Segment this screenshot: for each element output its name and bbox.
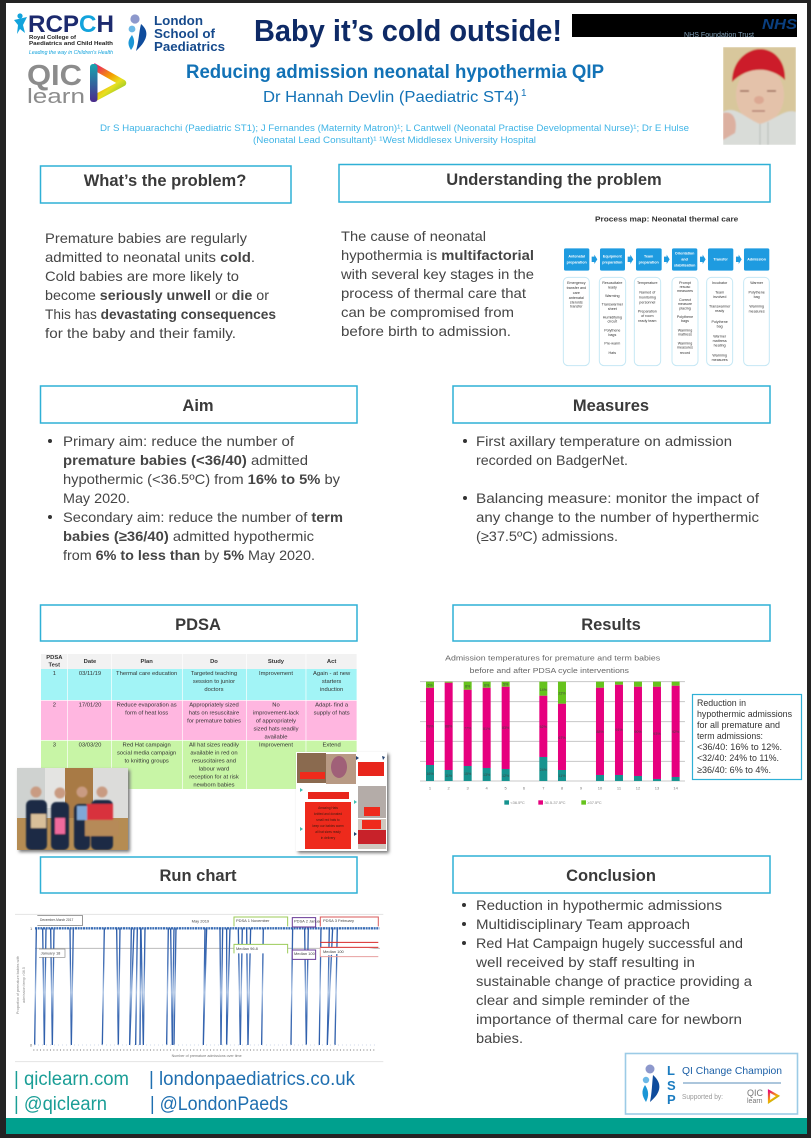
diagram: process map: placing xyxy=(679,306,691,310)
table: PDSA cycles: Reduce evaporation as xyxy=(117,703,177,709)
chart: admission temperatures stacked bars: 83% xyxy=(502,726,510,730)
callout: reduction in hypothermic admissions: for all premature and xyxy=(697,720,780,731)
chart: run chart: Proportion of premature babies with xyxy=(16,956,20,1014)
table: PDSA cycles: Again - at new xyxy=(313,671,351,677)
table: PDSA cycles: starters xyxy=(322,679,341,685)
footer band xyxy=(6,1118,807,1134)
diagram: process map: Orientation xyxy=(675,251,694,255)
diagram: process map: Team xyxy=(715,291,724,295)
table: PDSA cycles: Targeted teaching xyxy=(191,671,237,677)
diagram: process map: measures xyxy=(677,346,693,350)
table: PDSA cycles: Plan xyxy=(140,659,153,665)
text: measures list: Balancing measure: monitor the impact of xyxy=(476,490,759,506)
diagram: process map: Warmer xyxy=(713,335,727,339)
diagram: process map: Admission xyxy=(747,258,766,262)
text: conclusion list: Red Hat Campaign hugely successful and xyxy=(476,935,743,951)
diagram: process map: antenatal xyxy=(569,296,584,300)
poster: red hat campaign: in delivery xyxy=(321,836,336,840)
text: aims list: May 2020. xyxy=(63,490,130,506)
poster: red hat campaign: small red hats to xyxy=(316,818,340,822)
table: PDSA cycles: for premature babies xyxy=(187,719,241,725)
text: conclusion list: Multidisciplinary Team approach xyxy=(476,916,690,932)
chart: run chart: Median 96.8 xyxy=(236,946,259,951)
diagram: process map: bags xyxy=(681,319,689,323)
text: conclusion list: babies. xyxy=(476,1030,523,1046)
text: aims list xyxy=(48,433,343,563)
chart: admission temperatures stacked bars: 12 xyxy=(636,785,641,790)
chart: admission temperatures stacked bars: 91% xyxy=(615,728,623,732)
text: problem: admitted to neonatal units cold. xyxy=(45,249,255,265)
diagram: process map: Warming xyxy=(678,342,692,346)
logo: QIC learn xyxy=(27,60,123,108)
table: PDSA cycles: hats on resuscitaire xyxy=(189,711,239,717)
diagram: process map: record xyxy=(680,351,690,355)
chart: admission temperatures stacked bars: 5% xyxy=(503,683,509,687)
text: problem: for the baby and their family. xyxy=(45,325,236,341)
chart: admission temperatures stacked bars: 13 xyxy=(655,785,660,790)
callout: reduction in hypothermic admissions xyxy=(692,694,802,780)
diagram: process map: Emergency xyxy=(567,281,586,285)
badge: QI Change Champion xyxy=(626,1054,798,1114)
chart: admission temperatures stacked bars: 24% xyxy=(540,768,548,772)
chart: run chart: PDSA 1 November xyxy=(236,918,270,923)
panel: run chart heading: Run chart xyxy=(159,867,237,885)
chart: admission temperatures stacked bars: 78% xyxy=(426,725,434,729)
NHS logo bar xyxy=(572,14,797,39)
text: aims list: hypothermic (<36.5ºC) from 16% to 5% by xyxy=(63,471,340,487)
text: conclusion list xyxy=(462,897,752,1046)
chart: admission temperatures stacked bars: 2 xyxy=(448,785,451,790)
authors xyxy=(100,123,689,146)
diagram: process map: Process map: Neonatal thermal care xyxy=(595,215,738,224)
table: PDSA cycles: newborn babies xyxy=(193,783,235,789)
table: PDSA cycles: supply of hats xyxy=(314,711,350,717)
text: aims list: Secondary aim: reduce the number of term xyxy=(63,509,343,525)
chart: admission temperatures stacked bars: 6 xyxy=(523,785,526,790)
diagram: process map: sheet xyxy=(608,307,617,311)
title: Baby it’s cold outside! xyxy=(254,13,562,48)
diagram: process map: care xyxy=(573,291,580,295)
text: aims list: Primary aim: reduce the number of xyxy=(63,433,294,449)
diagram: process map: Transwarmer xyxy=(709,305,731,309)
table: PDSA cycles: Study xyxy=(268,659,285,665)
diagram: process map: bag xyxy=(717,324,723,328)
authors: Dr S Hapuarachchi (Paediatric ST1); J Fernandes (Maternity Matron)¹; L Cantwell (Neonatal Practise Developmental Nurse)¹; Dr E Hulse xyxy=(100,123,689,134)
diagram: process map: Hats xyxy=(609,351,616,355)
NHS logo bar: NHS Foundation Trust xyxy=(684,32,754,39)
footer links: London Paediatrics xyxy=(149,1069,355,1115)
diagram: process map: Warming xyxy=(605,294,620,298)
panel: run chart heading xyxy=(40,857,357,893)
chart: admission temperatures stacked bars: 16% xyxy=(426,772,434,776)
text: understanding: hypothermia is multifactorial xyxy=(341,247,534,263)
chart: admission temperatures stacked bars: 15% xyxy=(464,772,472,776)
footer links: London Paediatrics: | londonpaediatrics.co.uk xyxy=(149,1069,355,1090)
text: conclusion list: clear and simple reminder of the xyxy=(476,992,690,1008)
badge: QI Change Champion: Supported by: xyxy=(682,1092,723,1101)
table: PDSA cycles: PDSA xyxy=(46,655,63,661)
panel: measures heading: Measures xyxy=(573,397,649,415)
chart: run chart: Number of premature admissions over time xyxy=(172,1053,242,1058)
chart: admission temperatures stacked bars: 7 xyxy=(542,785,545,790)
text: measures list: (≥37.5ºC) admissions. xyxy=(476,528,618,544)
table: PDSA cycles: 17/01/20 xyxy=(79,703,102,709)
chart: admission temperatures stacked bars: 3 xyxy=(467,785,470,790)
poster: red hat campaign: Amazing Hats xyxy=(318,806,338,810)
text: measures list: First axillary temperature on admission xyxy=(476,433,732,449)
logo: RCPCH: RCPCH xyxy=(28,11,114,38)
diagram: process map: and xyxy=(681,257,688,261)
text: conclusion list: sustainable change of practice providing a xyxy=(476,973,752,989)
presenter: Dr Hannah Devlin (Paediatric ST4) xyxy=(263,89,519,106)
diagram: process map: stabilisation xyxy=(674,263,695,267)
table: PDSA cycles: available in red on xyxy=(190,751,238,757)
poster: red hat campaign: knitted and donated xyxy=(314,812,342,816)
diagram: process map: Resuscitaire xyxy=(602,281,622,285)
panel: understanding the problem heading: Understanding the problem xyxy=(446,171,662,189)
text: measures list: recorded on BadgerNet. xyxy=(476,452,628,468)
poster: red hat campaign: all hat sizes ready xyxy=(315,830,341,834)
logo: QIC learn: QIC xyxy=(27,60,82,92)
diagram: process map: Warming xyxy=(678,329,692,333)
panel: aim heading: Aim xyxy=(182,397,214,415)
table: PDSA cycles: Do xyxy=(210,659,218,665)
callout: reduction in hypothermic admissions: hypothermic admissions xyxy=(697,709,792,720)
chart: run chart: PDSA 2 January xyxy=(294,919,323,924)
table: PDSA cycles: Improvement xyxy=(259,671,293,677)
poster: red hat campaign xyxy=(296,752,387,851)
logo: QIC learn: learn xyxy=(27,86,85,108)
diagram: process map: Preparation xyxy=(638,309,657,313)
diagram: process map: Prompt xyxy=(679,281,691,285)
table: PDSA cycles: induction xyxy=(320,687,343,693)
chart: admission temperatures stacked bars: 92% xyxy=(672,730,680,734)
logo: RCPCH: Royal College of xyxy=(29,35,76,41)
logo: RCPCH xyxy=(14,11,114,56)
footer links: QIC learn: | @qiclearn xyxy=(14,1094,107,1115)
logo: RCPCH: Paediatrics and Child Health xyxy=(29,41,114,47)
chart: admission temperatures stacked bars: 9 xyxy=(580,785,583,790)
poster: red hat campaign: keep our babies warm xyxy=(312,824,344,828)
diagram: process map: Warmer xyxy=(750,281,764,285)
table: PDSA cycles: All hat sizes readily xyxy=(189,743,239,749)
text: problem: This has devastating consequences xyxy=(45,306,276,322)
logo: London School of Paediatrics: Paediatrics xyxy=(154,39,225,54)
chart: admission temperatures stacked bars: 36.5-37.5ºC xyxy=(544,800,566,805)
diagram: process map: transfer xyxy=(570,305,583,309)
table: PDSA cycles: 1 xyxy=(53,671,56,677)
badge: QI Change Champion: learn xyxy=(747,1098,763,1105)
text: problem: Premature babies are regularly xyxy=(45,230,247,246)
table: PDSA cycles: social media campaign xyxy=(117,751,176,757)
table: PDSA cycles: to knitting groups xyxy=(124,759,169,765)
chart: admission temperatures stacked bars: 4 xyxy=(486,785,489,790)
table: PDSA cycles: sized hats readily xyxy=(253,727,299,733)
photo: staff with hats xyxy=(17,768,128,850)
diagram: process map: measures xyxy=(712,358,728,362)
chart: run chart: 0 xyxy=(30,1043,33,1048)
table: PDSA cycles: 2 xyxy=(53,703,56,709)
diagram: process map: bag xyxy=(754,295,760,299)
table: PDSA cycles: form of heat loss xyxy=(125,711,168,717)
text: problem: become seriously unwell or die or xyxy=(45,287,269,303)
table: PDSA cycles: improvement-lack xyxy=(253,711,299,717)
diagram: process map: measures xyxy=(749,310,765,314)
callout: reduction in hypothermic admissions: <32/40: 24% to 11%. xyxy=(697,753,779,764)
table: PDSA cycles: labour ward xyxy=(199,767,229,773)
diagram: process map: ready xyxy=(715,309,724,313)
table: PDSA cycles: resuscitaires and xyxy=(192,759,236,765)
diagram: process map: ready team xyxy=(638,319,656,323)
diagram: process map: circuit xyxy=(608,320,617,324)
panel: PDSA heading: PDSA xyxy=(175,616,221,634)
chart: admission temperatures stacked bars: 8 xyxy=(561,785,564,790)
diagram: process map: mattress xyxy=(713,339,727,343)
table: PDSA cycles: Adapt- find a xyxy=(315,703,349,709)
diagram: process map: resusc xyxy=(680,285,691,289)
panel: aim heading xyxy=(40,386,357,423)
text: understanding xyxy=(340,228,534,339)
chart: run chart: admission temp >36.5 xyxy=(22,967,26,1003)
diagram: process map: preparation xyxy=(639,261,659,265)
text: conclusion list: Reduction in hypothermic admissions xyxy=(476,897,722,913)
chart: admission temperatures stacked bars: 14 xyxy=(673,785,679,790)
chart: admission temperatures stacked bars: 88% xyxy=(596,730,604,734)
diagram: process map: Named of xyxy=(639,291,656,295)
diagram: process map: of room xyxy=(641,314,654,318)
chart: run chart: Median 100 xyxy=(323,949,345,954)
chart: run chart: 1 xyxy=(30,926,33,931)
text: measures list: any change to the number of hyperthermic xyxy=(476,509,759,525)
text: conclusion list: importance of thermal care for newborn xyxy=(476,1011,742,1027)
chart: admission temperatures stacked bars: 77% xyxy=(464,727,472,731)
diagram: process map: steroids xyxy=(570,300,583,304)
diagram: process map: Equipment xyxy=(603,255,623,259)
diagram: process map: Pre-warm xyxy=(604,342,620,346)
panel: conclusion heading: Conclusion xyxy=(566,867,656,885)
logo: RCPCH: Leading the way in Children's Health xyxy=(29,50,113,56)
chart: admission temperatures stacked bars: 93% xyxy=(653,732,661,736)
chart: admission temperatures stacked bars: <36.5ºC xyxy=(510,800,525,805)
diagram: process map: heating xyxy=(714,343,726,347)
chart: admission temperatures stacked bars: 6% xyxy=(484,683,490,687)
table: PDSA cycles: Act xyxy=(327,659,336,665)
text: aims list: premature babies (<36/40) admitted xyxy=(63,452,308,468)
callout: reduction in hypothermic admissions: <36/40: 16% to 12%. xyxy=(697,742,782,753)
panel: understanding the problem heading xyxy=(339,164,770,202)
chart: admission temperatures stacked bars: 12% xyxy=(502,774,510,778)
callout: reduction in hypothermic admissions: term admissions: xyxy=(697,731,763,742)
table: PDSA cycles: 03/11/19 xyxy=(79,671,101,677)
table: PDSA cycles: session to junior xyxy=(193,679,235,685)
chart: admission temperatures stacked bars: 81% xyxy=(483,727,491,731)
diagram: process map: measures xyxy=(677,289,693,293)
table: PDSA cycles: Date xyxy=(84,659,97,665)
chart: run chart: PDSA 3 February xyxy=(323,918,354,923)
chart: admission temperatures stacked bars: before and after PDSA cycle interventions xyxy=(470,668,630,675)
chart: admission temperatures stacked bars: 6% xyxy=(427,683,433,687)
logo: London School of Paediatrics: London xyxy=(154,13,203,28)
table: PDSA cycles: 03/03/20 xyxy=(79,743,102,749)
callout: reduction in hypothermic admissions: Reduction in xyxy=(697,698,746,709)
footer links: London Paediatrics: | @LondonPaeds xyxy=(150,1094,288,1115)
chart: admission temperatures stacked bars: 90% xyxy=(634,730,642,734)
table: PDSA cycles: available xyxy=(264,735,287,741)
logo: London School of Paediatrics: School of xyxy=(154,26,216,41)
text: conclusion list: well received by staff resulting in xyxy=(475,954,695,970)
chart: admission temperatures stacked bars: 14% xyxy=(540,688,548,692)
badge: QI Change Champion: QI Change Champion xyxy=(682,1065,782,1077)
diagram: process map xyxy=(563,215,769,366)
diagram: process map: Transfer xyxy=(713,258,728,262)
diagram: process map: Polythene xyxy=(712,320,728,324)
text: aims list: from 6% to less than by 5% May 2020. xyxy=(63,547,315,563)
text: understanding: process of thermal care that xyxy=(341,285,526,301)
chart: admission temperatures stacked bars: 88% xyxy=(445,725,453,729)
badge: QI Change Champion: S xyxy=(667,1078,676,1093)
chart: run chart: Median 100 xyxy=(294,951,316,956)
table: PDSA cycles: Red Hat campaign xyxy=(123,743,171,749)
chart: admission temperatures stacked bars: 13% xyxy=(483,773,491,777)
text: understanding: can be compromised from xyxy=(341,304,514,320)
table: PDSA cycles: Thermal care education xyxy=(116,671,177,677)
diagram: process map: involved xyxy=(713,295,726,299)
table: PDSA cycles xyxy=(41,654,357,789)
chart: admission temperatures stacked bars: 62% xyxy=(540,725,548,729)
chart: admission temperatures stacked bars: 67% xyxy=(558,736,566,740)
diagram: process map: bags xyxy=(608,333,616,337)
chart: admission temperatures stacked bars: 11% xyxy=(445,774,453,778)
panel: what's the problem heading xyxy=(40,166,291,203)
chart: admission temperatures stacked bars: 22% xyxy=(558,692,566,696)
panel: results heading xyxy=(453,605,770,641)
photo: baby in red hat xyxy=(723,47,796,145)
panel: PDSA heading xyxy=(40,605,357,641)
diagram: process map: preparation xyxy=(602,261,622,265)
logo: London School of Paediatrics xyxy=(128,13,225,54)
table: PDSA cycles: No xyxy=(272,703,280,709)
diagram: process map: mattress xyxy=(678,333,692,337)
diagram: process map: preparation xyxy=(567,261,587,265)
diagram: process map: Warming xyxy=(749,304,764,308)
diagram: process map: monitoring xyxy=(639,295,656,299)
footer links: QIC learn xyxy=(14,1069,129,1115)
diagram: process map: measure xyxy=(678,302,692,306)
chart: run chart: May 2019 xyxy=(192,919,210,924)
diagram: process map: Correct xyxy=(679,298,691,302)
text: understanding: The cause of neonatal xyxy=(341,228,486,244)
authors: (Neonatal Lead Consultant)¹ ¹West Middlesex University Hospital xyxy=(253,135,536,146)
NHS logo bar: NHS xyxy=(762,16,797,33)
table: PDSA cycles: Appropriately sized xyxy=(189,703,239,709)
diagram: process map: transfer and xyxy=(567,286,586,290)
diagram: process map: Polythene xyxy=(749,291,765,295)
diagram: process map: Humidifying xyxy=(603,315,622,319)
callout: reduction in hypothermic admissions: ≥36/40: 6% to 4%. xyxy=(697,765,771,776)
panel: results heading: Results xyxy=(581,616,641,634)
badge: QI Change Champion: L xyxy=(667,1063,675,1078)
panel: conclusion heading xyxy=(453,856,770,893)
badge: QI Change Champion: P xyxy=(667,1092,676,1107)
chart: admission temperatures stacked bars: 1 xyxy=(429,785,432,790)
text: understanding: before birth to admission. xyxy=(341,323,511,339)
text: problem: Cold babies are more likely to xyxy=(45,268,239,284)
chart: admission temperatures stacked bars: 11 xyxy=(617,785,622,790)
chart: admission temperatures stacked bars: Admission temperatures for premature and term babies xyxy=(445,656,661,663)
table: PDSA cycles: doctors xyxy=(204,687,224,693)
diagram: process map: Polythene xyxy=(604,329,620,333)
badge: QI Change Champion: QIC xyxy=(747,1088,764,1098)
diagram: process map: Warming xyxy=(712,354,727,358)
table: PDSA cycles: of appropriately xyxy=(256,719,296,725)
chart: admission temperatures stacked bars: ≥37.5ºC xyxy=(587,800,602,805)
table: PDSA cycles: reception for at risk xyxy=(189,775,239,781)
diagram: process map: personnel xyxy=(639,300,656,304)
panel: measures heading xyxy=(453,386,770,423)
diagram: process map: Transwarmer xyxy=(602,303,624,307)
footer links: QIC learn: | qiclearn.com xyxy=(14,1069,129,1090)
table: PDSA cycles: Improvement xyxy=(259,743,293,749)
chart: admission temperatures stacked bars: 5 xyxy=(505,785,508,790)
subtitle: Reducing admission neonatal hypothermia QIP xyxy=(186,62,604,83)
text: aims list: babies (≥36/40) admitted hypothermic xyxy=(63,528,314,544)
chart: admission temperatures stacked bars: 11% xyxy=(558,774,566,778)
diagram: process map: Antenatal xyxy=(568,255,585,259)
diagram: process map: Incubator xyxy=(712,281,728,285)
text: problem xyxy=(45,230,276,341)
table: PDSA cycles: Test xyxy=(49,662,60,668)
chart: run chart: December-March 2017 xyxy=(40,917,74,922)
text: measures list xyxy=(463,433,759,544)
chart: run chart xyxy=(15,914,383,1062)
chart: admission temperatures stacked bars: 8% xyxy=(465,684,471,688)
diagram: process map: Team xyxy=(644,255,654,259)
chart: run chart: January 18 xyxy=(41,950,61,955)
table: PDSA cycles: Extend xyxy=(323,743,341,749)
text: understanding: with several key stages in the xyxy=(340,266,534,282)
table: PDSA cycles: 3 xyxy=(53,743,56,749)
presenter: 1 xyxy=(521,88,527,99)
chart: admission temperatures stacked bars: 10 xyxy=(598,785,603,790)
panel: what's the problem heading: What’s the problem? xyxy=(84,172,246,190)
diagram: process map: ready xyxy=(608,285,617,289)
diagram: process map: Temperature xyxy=(637,281,658,285)
chart: admission temperatures stacked bars xyxy=(420,656,685,805)
diagram: process map: Polythene xyxy=(677,315,693,319)
